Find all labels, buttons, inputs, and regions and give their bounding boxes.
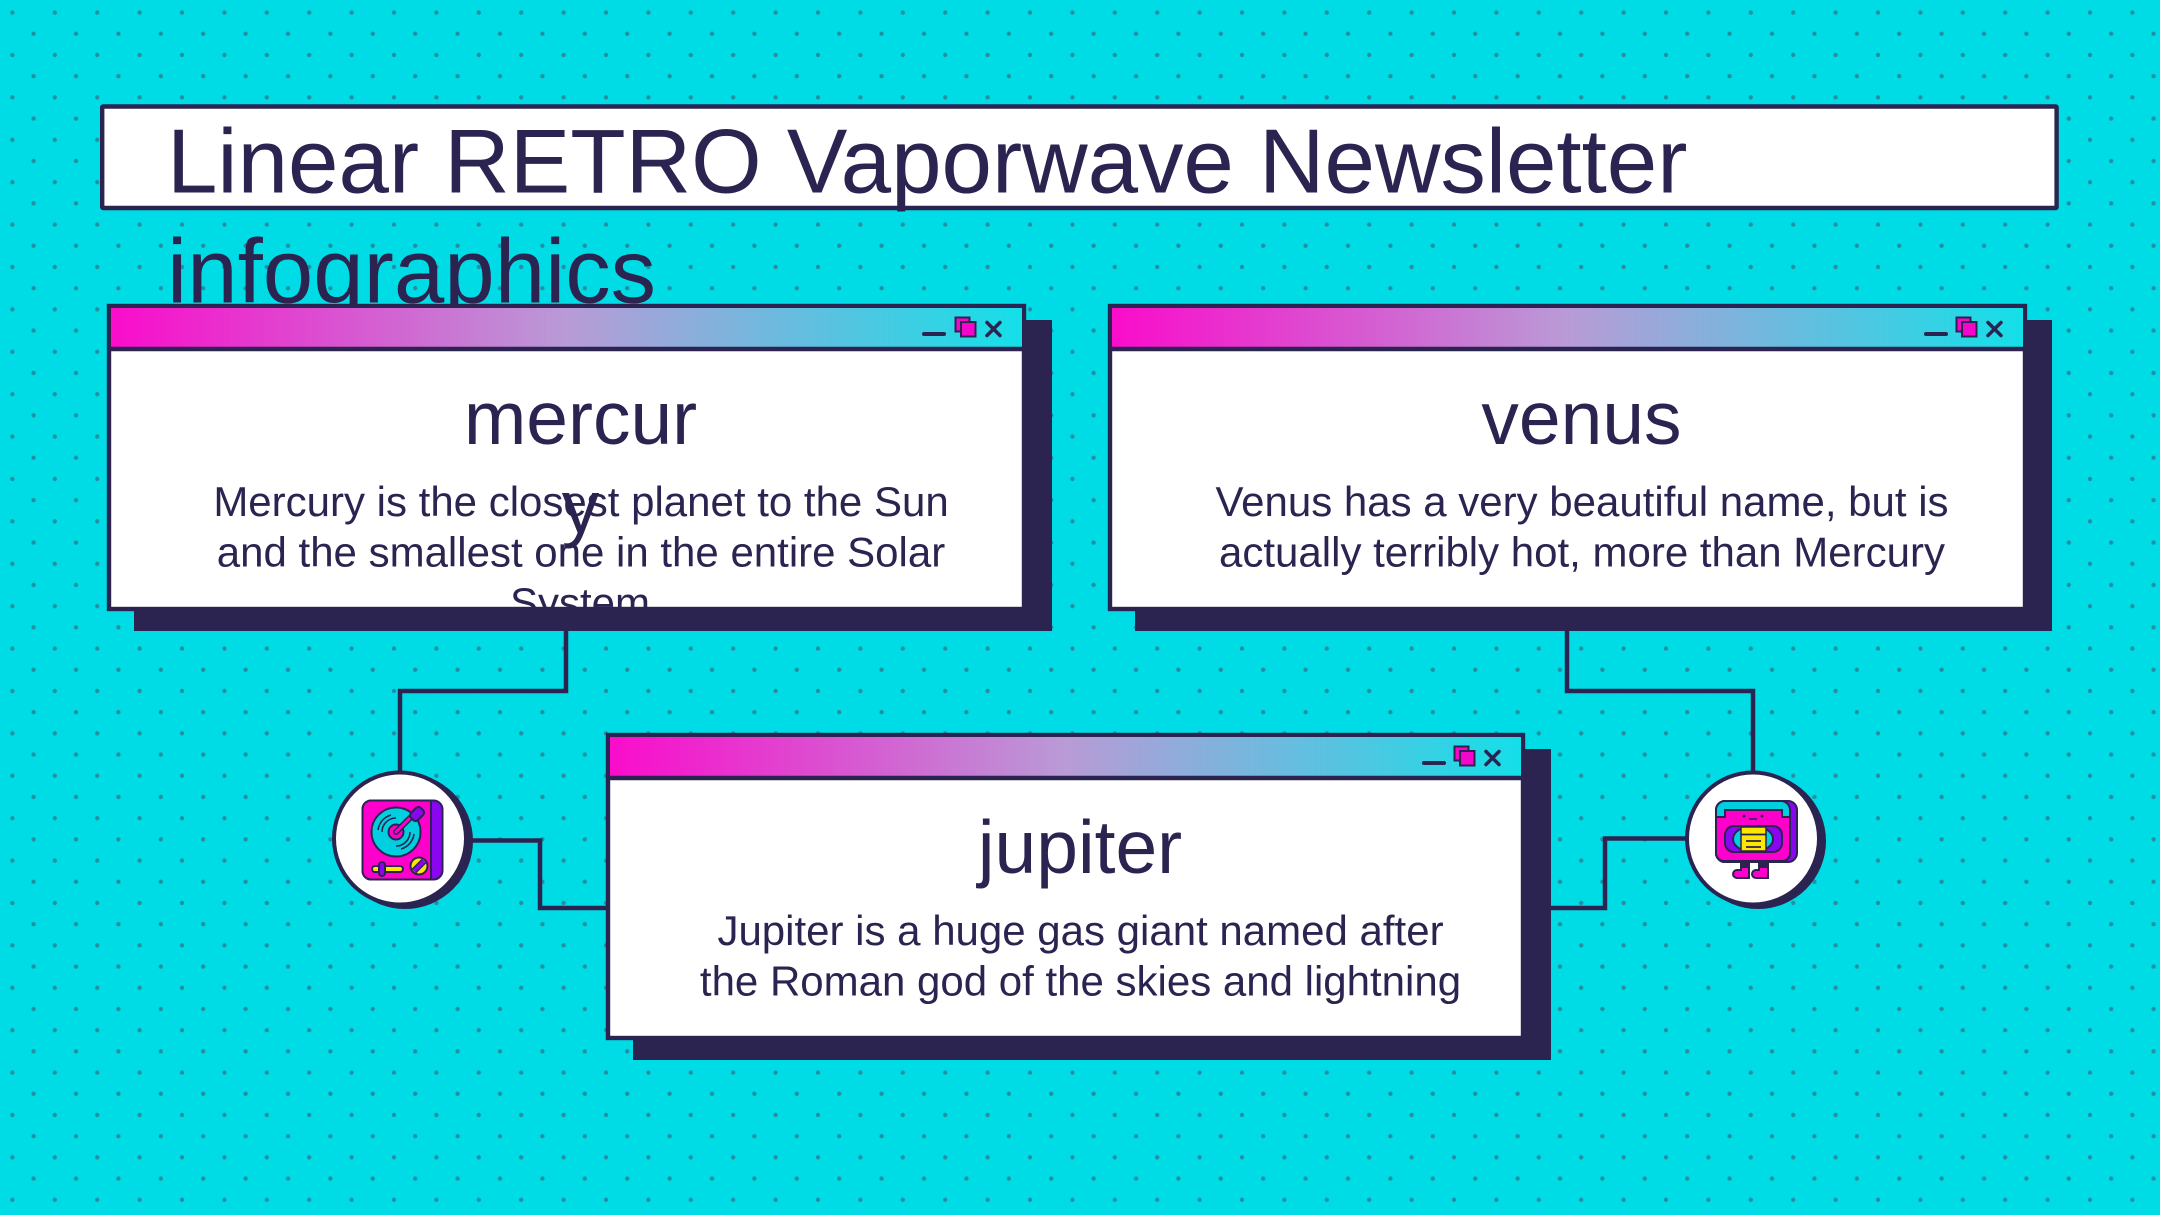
connector: jupiter to cassette icon: [1545, 838, 1690, 908]
title: infographics: [167, 222, 656, 323]
icon: turntable: [334, 772, 473, 909]
heading: venus: venus: [1481, 376, 1682, 460]
text: venus description: Venus has a very beautiful name, but is: [1215, 478, 1949, 525]
text: mercury description: Mercury is the closest planet to the Sun: [213, 478, 949, 525]
text: mercury description: and the smallest one in the entire Solar: [217, 528, 945, 576]
title bar: [1110, 308, 2025, 349]
text: jupiter description: the Roman god of the skies and lightning: [700, 958, 1461, 1004]
text: mercury description: System: [510, 579, 650, 626]
text: mercury description: [216, 486, 946, 607]
connector: venus to cassette icon: [1567, 625, 1753, 775]
text: venus description: actually terribly hot, more than Mercury: [1219, 528, 1945, 576]
panel: jupiter: [608, 735, 1551, 1060]
title: Linear RETRO Vaporwave Newsletter: [167, 112, 1687, 213]
icon: cassette character: [1687, 772, 1826, 909]
text: jupiter description: Jupiter is a huge gas giant named after: [717, 907, 1444, 954]
heading: mercury: [468, 403, 696, 548]
connector: turntable icon to jupiter: [470, 840, 610, 908]
connector: mercury to turntable icon: [400, 625, 566, 775]
panel: mercury: [109, 306, 1052, 631]
heading: mercury: y: [562, 465, 600, 549]
title bar: [109, 308, 1024, 349]
title panel: [102, 106, 2057, 323]
heading: jupiter: jupiter: [976, 805, 1182, 889]
heading: mercury: mercur: [464, 376, 697, 460]
panel: venus: [1110, 306, 2052, 631]
title bar: [608, 737, 1523, 778]
